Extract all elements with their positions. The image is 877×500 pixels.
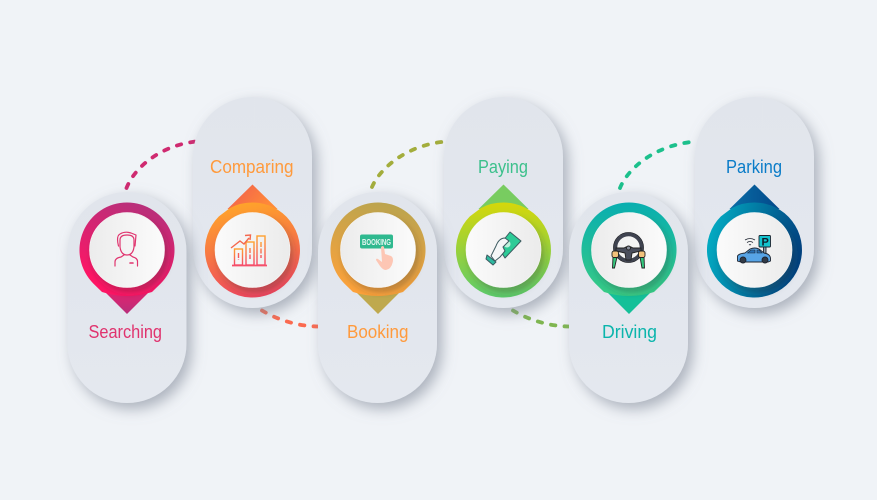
heading: Booking: Booking [347, 322, 408, 342]
connector: paying to driving [513, 310, 571, 326]
pin: searching [79, 202, 175, 314]
panel: paying pill [444, 97, 563, 308]
pin: comparing [205, 184, 300, 297]
icon: booking button with pointing hand: BOOKING [362, 237, 391, 247]
panel: comparing pill [193, 97, 312, 308]
heading: Parking: Parking [726, 157, 782, 177]
connector: driving to parking [620, 142, 697, 188]
connector: booking to paying [372, 142, 447, 187]
heading: Searching: Searching [88, 322, 162, 342]
panel: booking pill [318, 192, 437, 403]
panel: searching pill [68, 192, 186, 403]
connector: searching to comparing [126, 142, 196, 188]
panel: parking pill [695, 97, 814, 308]
icon: car with parking sign and wifi: P [762, 236, 769, 248]
icon: hands on steering wheel [612, 232, 645, 268]
icon: bar chart with rising arrow [231, 235, 267, 266]
icon: person [115, 232, 138, 266]
pin: booking [330, 202, 426, 314]
heading: Comparing: Comparing [210, 157, 294, 177]
heading: Paying: Paying [478, 157, 528, 177]
icon: hand holding banknote [486, 232, 521, 265]
connector: comparing to booking [262, 310, 320, 326]
panel: driving pill [569, 192, 688, 403]
pin: parking [707, 184, 802, 297]
pin: paying [456, 184, 551, 297]
heading: Driving: Driving [602, 322, 657, 342]
pin: driving [581, 202, 677, 314]
